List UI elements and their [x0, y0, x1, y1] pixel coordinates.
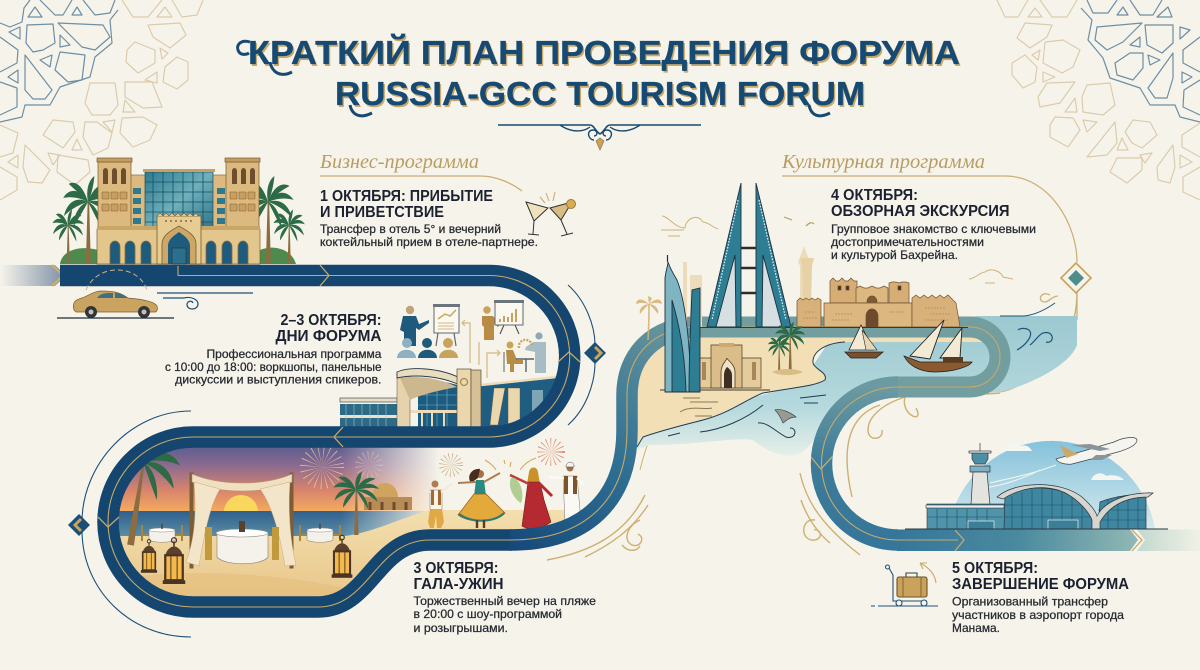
text block: 1 October: И ПРИВЕТСТВИЕ — [320, 204, 444, 221]
gold centre line — [108, 266, 1000, 607]
dome pavilion — [364, 483, 412, 510]
sea creatures and ripples — [775, 409, 796, 423]
title divider ornament — [498, 125, 701, 150]
navy section — [60, 276, 570, 607]
sunset sky — [120, 448, 434, 511]
grey-teal bay loop — [695, 327, 1000, 387]
text block: 5 October: 5 ОКТЯБРЯ: — [952, 560, 1038, 577]
presenter — [406, 306, 414, 314]
beach gala scene — [118, 438, 584, 596]
text block: 2–3 October: ДНИ ФОРУМА — [276, 328, 382, 345]
audience — [397, 338, 458, 358]
sky circle — [948, 441, 1155, 529]
text block: 3 October: Торжественный вечер на пляже — [414, 595, 596, 608]
bahrain coast sand — [620, 334, 990, 447]
text block: 5 October: участников в аэропорт города — [952, 609, 1125, 622]
diamond: cultural route marker — [1061, 263, 1091, 293]
icon: cocktail glasses — [526, 192, 576, 236]
main terminal — [968, 485, 1153, 529]
forum icons — [397, 300, 546, 378]
text block: 3 October: 3 ОКТЯБРЯ: — [414, 560, 498, 577]
towers — [97, 158, 260, 230]
bay: teal water — [630, 316, 1077, 456]
text block: 4 October: 4 ОКТЯБРЯ: — [831, 187, 918, 204]
world trade centre towers — [707, 183, 791, 327]
heading: cultural programme: Культурная программа — [781, 151, 985, 173]
text block: 2–3 October: дискуссии и выступления спикеров. — [175, 374, 382, 386]
diamond: gala route marker — [68, 514, 90, 536]
palms beside hotel — [63, 176, 114, 264]
chart board — [500, 325, 519, 334]
text block: 1 October: 1 ОКТЯБРЯ: ПРИБЫТИЕ — [320, 188, 493, 205]
text block: 2–3 October — [165, 312, 382, 386]
title: КРАТКИЙ ПЛАН ПРОВЕДЕНИЯ ФОРУМА — [248, 33, 960, 71]
text block: 5 October: ЗАВЕРШЕНИЕ ФОРУМА — [952, 576, 1129, 593]
section line: cultural programme — [782, 176, 1077, 320]
distant palm — [636, 296, 662, 340]
blue descending arc — [822, 387, 898, 540]
text block: 4 October: Групповое знакомство с ключевыми — [831, 223, 1036, 236]
gate building — [660, 343, 770, 390]
teal transition section — [510, 327, 697, 540]
side tables — [142, 524, 340, 542]
text block: 3 October: и розыгрышами. — [414, 622, 508, 635]
meeting — [506, 342, 514, 348]
glass atrium — [145, 172, 213, 232]
waves — [1017, 328, 1052, 350]
base — [97, 229, 260, 264]
text block: 4 October: достопримечательностями — [831, 236, 984, 249]
text block: 1 October: Трансфер в отель 5° и вечерний — [320, 223, 501, 236]
title: КРАТКИЙ ПЛАН ПРОВЕДЕНИЯ ФОРУМА — [250, 35, 962, 73]
car with motion lines — [57, 270, 253, 318]
text block: 5 October — [952, 560, 1129, 635]
route: timeline road — [0, 265, 1200, 607]
section line: business programme — [320, 176, 522, 191]
pattern: top-right arabesque — [997, 0, 1200, 200]
control tower — [969, 443, 991, 505]
text block: 5 October: Организованный трансфер — [952, 596, 1108, 608]
text block: 4 October — [831, 187, 1036, 262]
canopy with table — [186, 473, 296, 568]
bay details — [668, 294, 1058, 437]
lanterns — [141, 535, 352, 584]
clouds — [1003, 443, 1124, 480]
title: RUSSIA-GCC TOURISM FORUM — [336, 77, 866, 114]
fireworks — [311, 445, 558, 478]
navy arcs beside the route — [82, 285, 595, 637]
heading: business programme: Бизнес-программа — [319, 151, 479, 173]
text block: 4 October: ОБЗОРНАЯ ЭКСКУРСИЯ — [831, 203, 1010, 220]
text block: 3 October: ГАЛА-УЖИН — [414, 576, 504, 593]
foreground towers — [665, 255, 700, 392]
left terminal — [926, 504, 1005, 529]
final straight — [897, 530, 1138, 551]
sand details — [680, 398, 718, 416]
bahrain skyline — [636, 183, 1013, 416]
text block: 3 October — [414, 560, 596, 635]
presenter two — [483, 306, 491, 314]
dancers — [423, 462, 584, 529]
conference hall — [340, 369, 556, 427]
text block: 2–3 October: Профессиональная программа — [206, 348, 382, 361]
background skyline — [683, 246, 810, 327]
small dhow — [845, 325, 883, 358]
title — [238, 33, 962, 116]
large dhow — [904, 320, 972, 372]
icon: luggage trolley — [871, 563, 938, 606]
road start fade — [0, 265, 66, 286]
airport illustration — [905, 438, 1168, 529]
central gate — [157, 216, 201, 264]
text block: 5 October: Манама. — [952, 622, 1000, 635]
bushes — [60, 248, 296, 264]
gold arrows — [462, 320, 500, 378]
hotel illustration — [52, 158, 305, 264]
palms — [127, 453, 180, 546]
text block: 4 October: и культурой Бахрейна. — [831, 249, 958, 262]
sand — [120, 510, 581, 596]
title: RUSSIA-GCC TOURISM FORUM — [335, 75, 865, 112]
chevrons — [98, 265, 1142, 551]
sea — [118, 511, 426, 536]
qal'at fort — [797, 278, 960, 327]
text block: 2–3 October: 2–3 ОКТЯБРЯ: — [280, 312, 382, 329]
gold filigree ornaments — [547, 290, 1077, 560]
flip chart — [436, 333, 456, 346]
plane — [1056, 438, 1137, 464]
text block: 1 October: коктейльный прием в отеле-партнере. — [320, 236, 538, 249]
diamond: business route marker — [584, 342, 606, 364]
sun — [224, 495, 258, 512]
text block: 2–3 October: с 10:00 до 18:00: воркшопы, панельные — [165, 361, 382, 374]
text block: 1 October — [320, 188, 538, 249]
beach palms — [768, 335, 791, 372]
text block: 3 October: в 20:00 с шоу-программой — [414, 608, 562, 621]
contrail — [983, 465, 1056, 488]
side wings — [130, 175, 148, 230]
pattern: top-left arabesque — [0, 0, 203, 200]
